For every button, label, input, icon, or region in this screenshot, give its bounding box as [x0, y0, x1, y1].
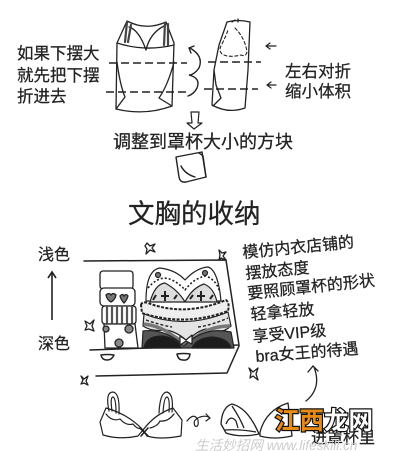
- icon: curved fold arrow: [188, 46, 200, 96]
- text: fold in half caption: 缩小体积: [285, 82, 351, 101]
- icon: squiggle arrow: [187, 414, 210, 426]
- text: display like a lingerie store: bra女王的待遇: [255, 339, 359, 366]
- text: fold in half caption: 左右对折: [285, 62, 351, 81]
- text: hem folding tip: 折进去: [17, 87, 66, 106]
- text: display like a lingerie store: 享受VIP级: [252, 322, 327, 346]
- illustration: camisole folded in half: [212, 19, 250, 110]
- illustration: folded square: [176, 152, 206, 182]
- illustration: open bra: [100, 392, 182, 438]
- icon: sparkles: [81, 243, 258, 385]
- illustration: rolled socks: [100, 271, 138, 348]
- illustration: storage box: [84, 260, 239, 376]
- text: hem folding tip: [17, 44, 100, 106]
- illustration: stacked bras: [141, 267, 234, 348]
- text: adjust to cup size: 调整到罩杯大小的方块: [113, 132, 293, 152]
- text: display like a lingerie store: [242, 233, 376, 366]
- icon: curved up arrow: [306, 366, 318, 401]
- illustration: folded bra: [221, 403, 292, 438]
- fold lines: [106, 62, 261, 92]
- legend: light to dark: 深色: [38, 335, 70, 353]
- legend: light to dark: [38, 246, 70, 353]
- text: fold in half caption: [285, 62, 351, 101]
- illustration: camisole front: [116, 21, 174, 112]
- icon: side arrows: [266, 43, 276, 88]
- text: display like a lingerie store: 要照顾罩杯的形状: [247, 272, 376, 303]
- watermark: site logo: 江西龙网: [275, 407, 373, 435]
- legend: light to dark: 浅色: [38, 246, 70, 264]
- text: display like a lingerie store: 摆放态度: [245, 259, 310, 283]
- text: hem folding tip: 就先把下摆: [17, 66, 100, 85]
- text: display like a lingerie store: 轻拿轻放: [250, 299, 315, 324]
- icon: down arrow: [187, 112, 202, 129]
- text: hem folding tip: 如果下摆大: [17, 44, 100, 63]
- title: 文胸的收纳: [128, 199, 260, 229]
- text: tuck straps into cup: 进罩杯里: [311, 429, 375, 447]
- text: display like a lingerie store: 模仿内衣店铺的: [242, 233, 355, 262]
